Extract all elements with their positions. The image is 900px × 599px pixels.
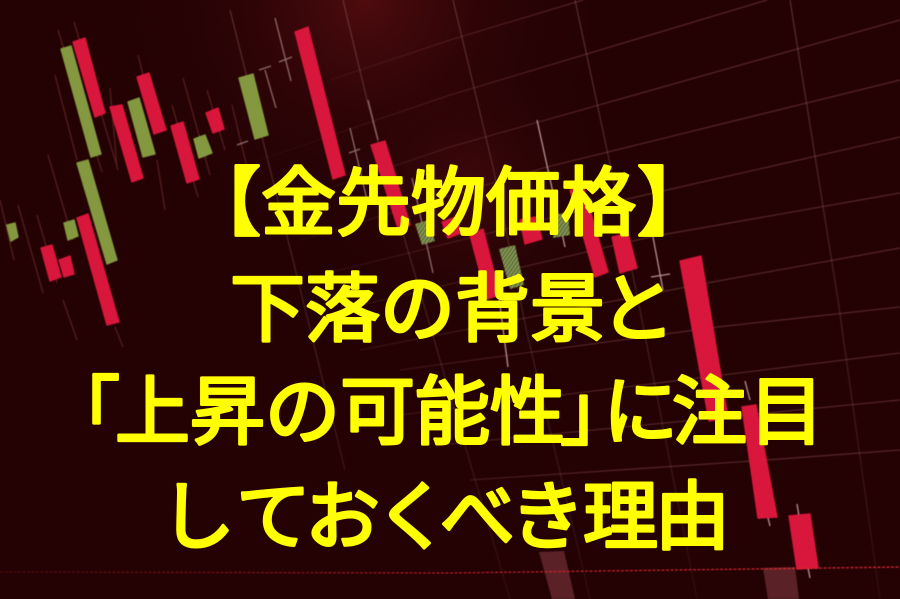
faded volume bars xyxy=(539,551,799,599)
green candles xyxy=(7,46,268,264)
title line 3: 「上昇の可能性」に注目 xyxy=(45,370,824,454)
title xyxy=(45,161,824,559)
title line 2: 下落の背景と xyxy=(230,267,675,351)
red candles xyxy=(41,27,818,569)
title line 4: しておくべき理由 xyxy=(160,475,730,559)
baseline price line xyxy=(0,567,900,573)
hatched candles xyxy=(415,212,570,289)
grid lines xyxy=(230,0,900,599)
title line 1: 【金先物価格】 xyxy=(186,161,712,245)
